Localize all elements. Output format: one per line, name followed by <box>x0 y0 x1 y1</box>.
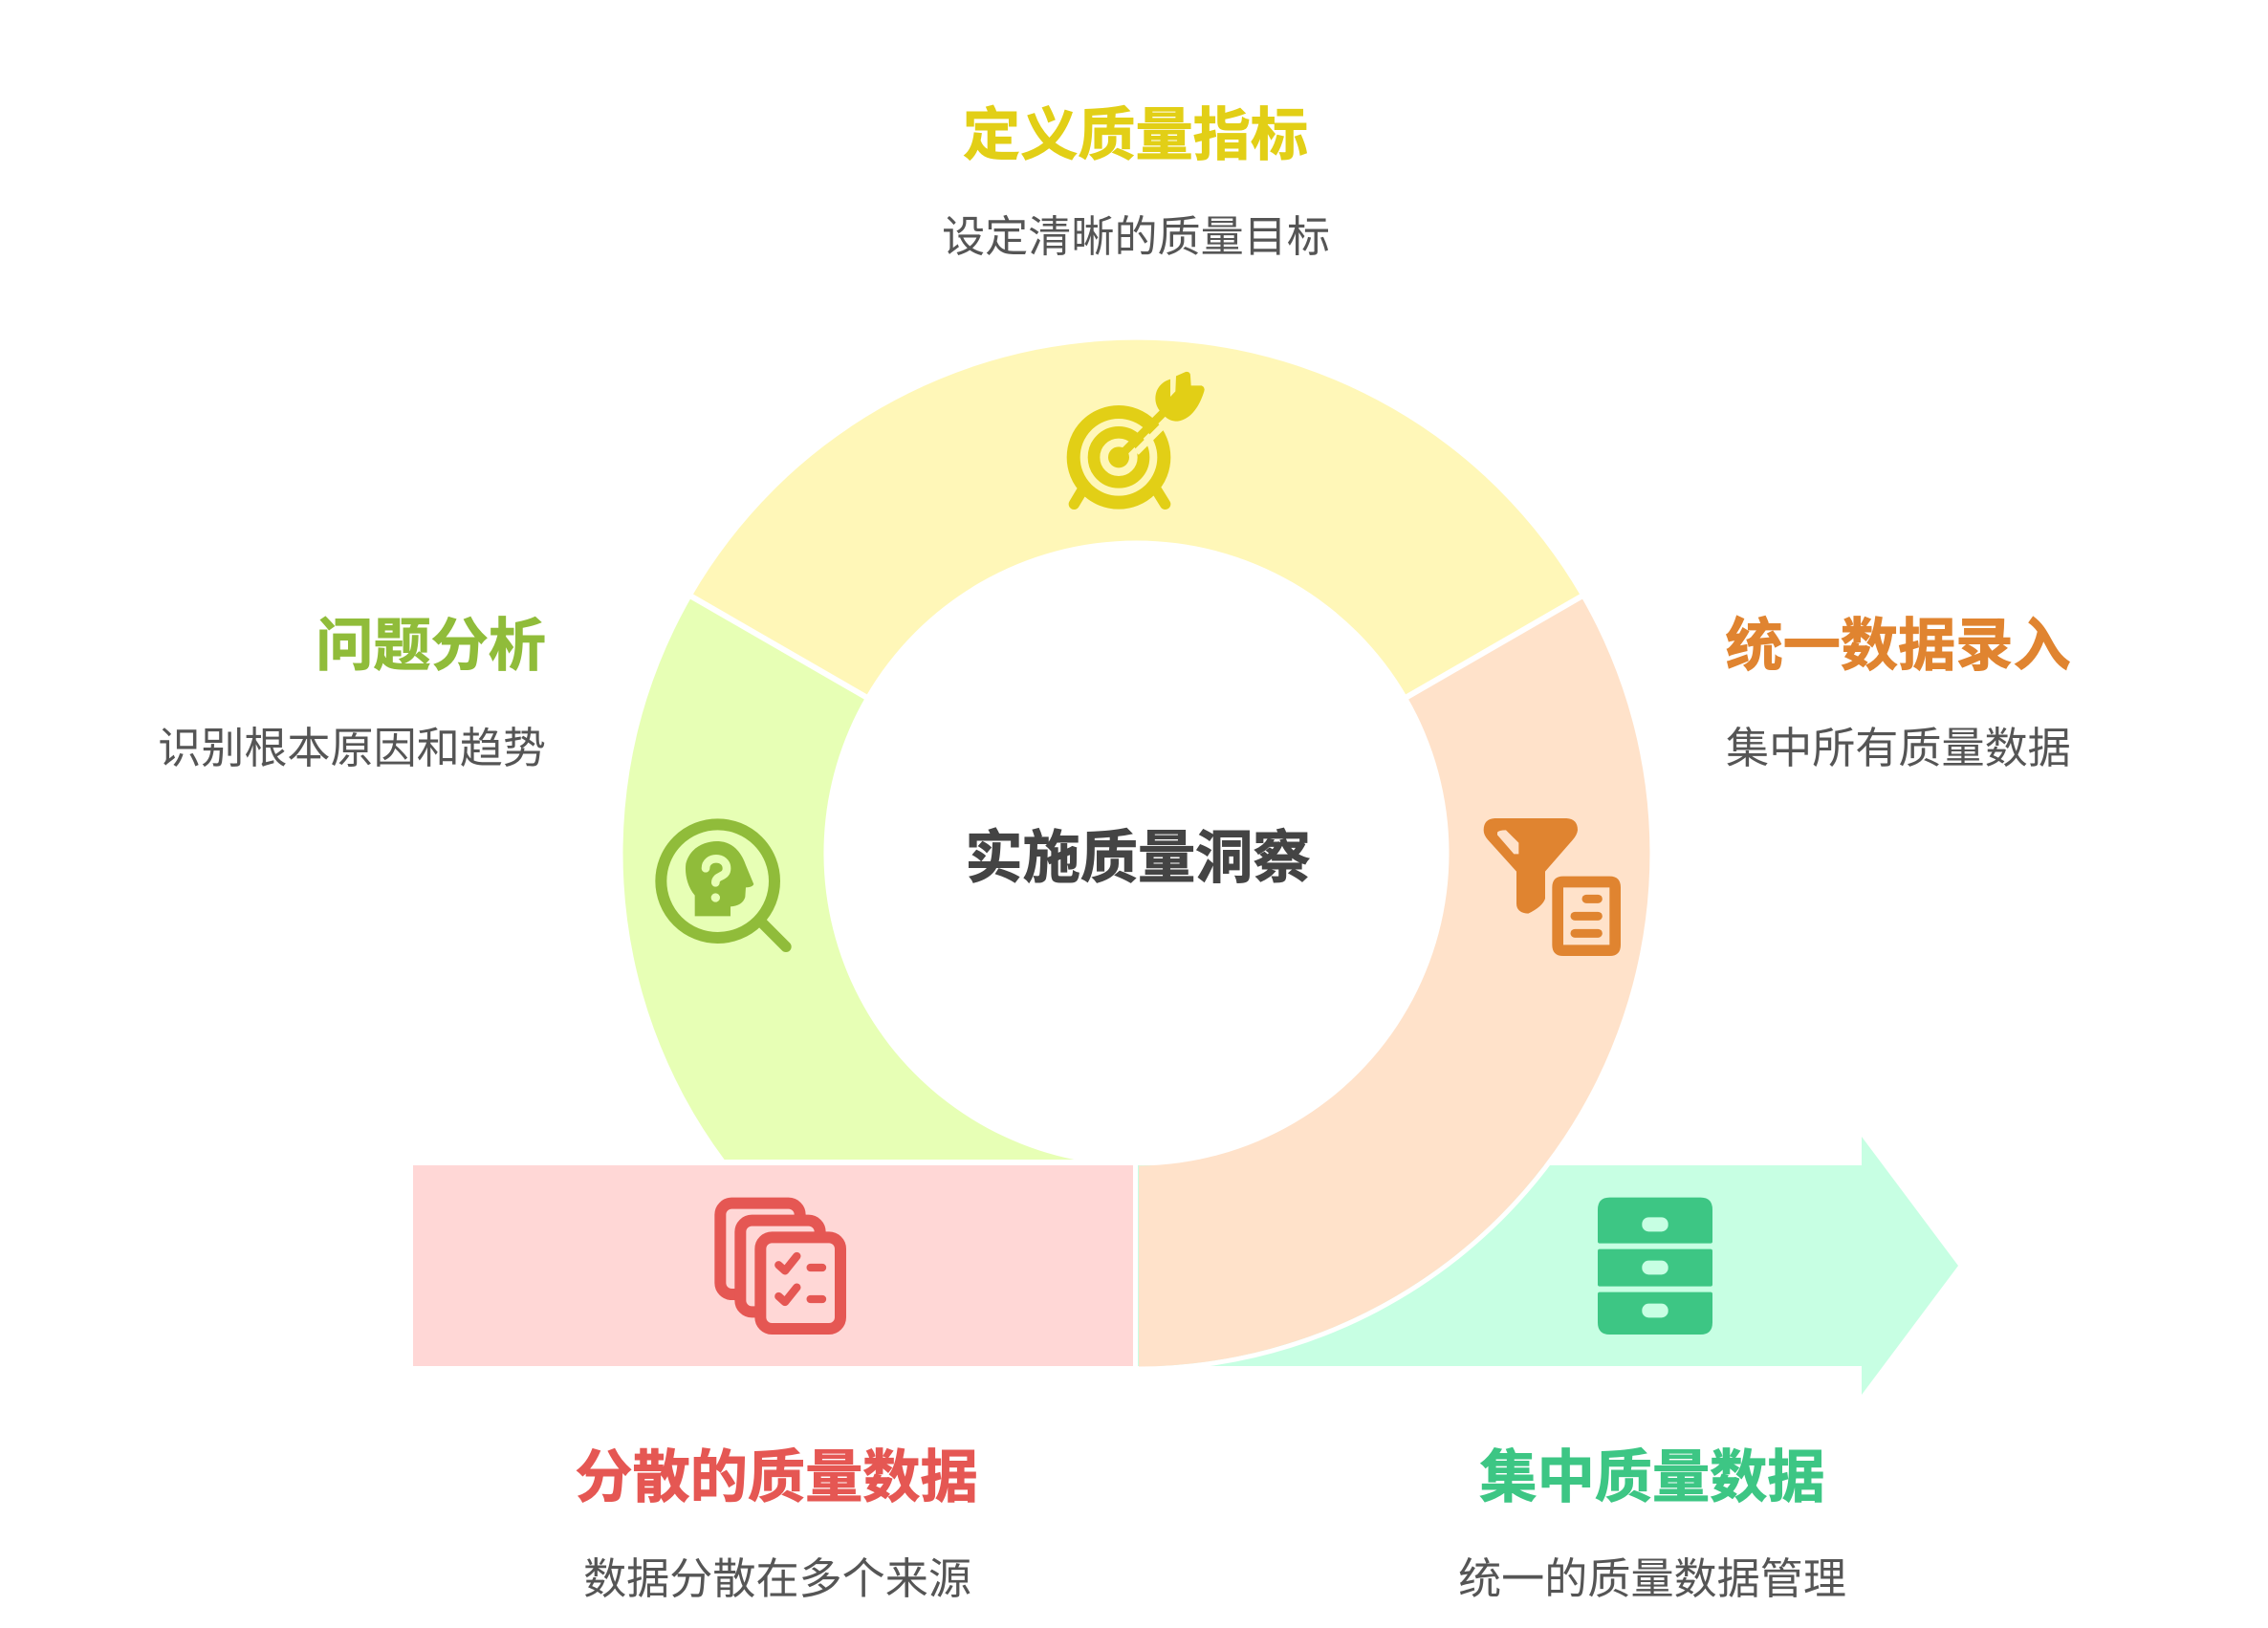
panel: ring segment define metrics <box>692 340 1581 697</box>
heading block: unified entry: 统一数据录入 <box>1725 614 2071 678</box>
panel: scattered data bar <box>413 1165 1133 1366</box>
panel: centralized data arrow <box>1138 1137 1958 1395</box>
icon: target with dart <box>1074 372 1205 504</box>
heading block: unified entry: 集中所有质量数据 <box>1726 724 2071 772</box>
heading block: scattered data: 分散的质量数据 <box>575 1445 978 1509</box>
heading block: centralized data: 统一的质量数据管理 <box>1458 1554 1846 1603</box>
heading block: scattered data <box>575 1445 978 1603</box>
heading block: define metrics <box>942 103 1330 261</box>
heading block: define metrics: 设定清晰的质量目标 <box>942 212 1330 261</box>
heading block: scattered data: 数据分散在多个来源 <box>583 1554 971 1603</box>
icon: file cabinet <box>1598 1198 1712 1335</box>
heading block: problem analysis: 问题分析 <box>316 614 546 678</box>
heading block: problem analysis <box>158 614 546 772</box>
panel: ring segment unified entry <box>1139 597 1649 1367</box>
heading block: unified entry <box>1725 614 2071 772</box>
heading block: problem analysis: 识别根本原因和趋势 <box>158 724 546 772</box>
icon: head with question mark in magnifier <box>661 824 786 946</box>
icon: stacked checklists <box>720 1204 840 1329</box>
icon: funnel and document <box>1484 818 1621 956</box>
heading block: centralized data: 集中质量数据 <box>1479 1445 1825 1509</box>
heading block: centralized data <box>1458 1445 1846 1603</box>
center title: 实施质量洞察 <box>965 826 1311 890</box>
panel: ring segment problem analysis <box>623 597 1074 1160</box>
heading block: define metrics: 定义质量指标 <box>963 103 1308 167</box>
